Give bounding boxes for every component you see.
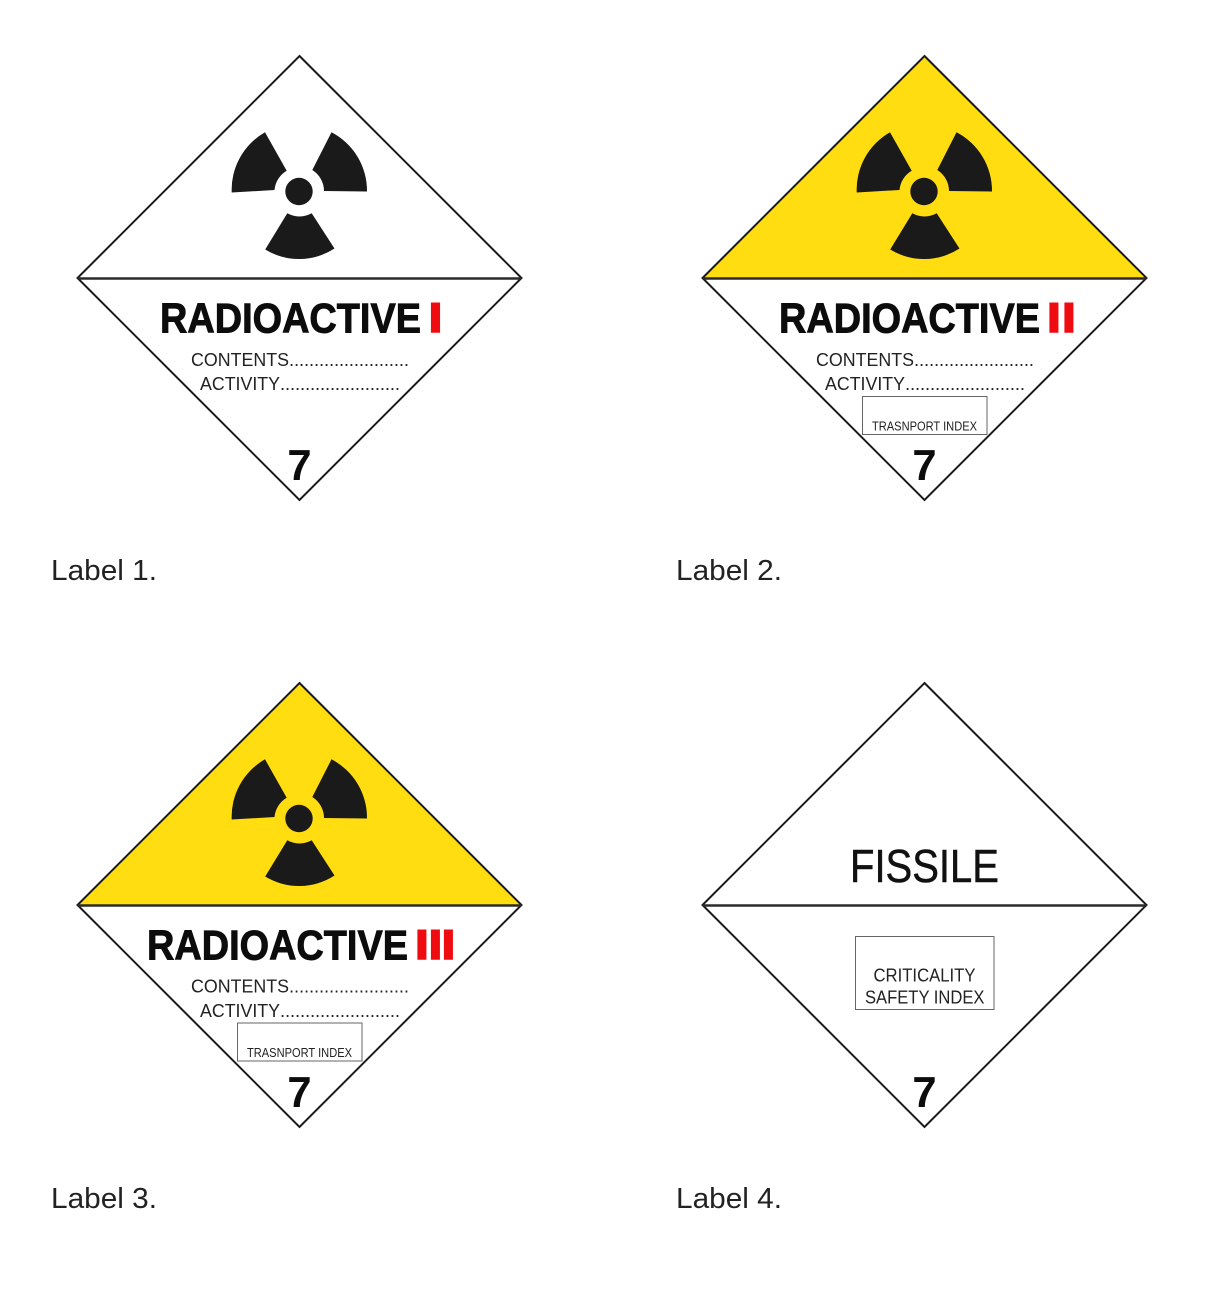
- text: contents line: CONTENTS: [191, 976, 289, 996]
- icon: radiation trefoil: [232, 759, 367, 886]
- transport index box: TRASNPORT INDEX: [247, 1046, 353, 1060]
- diamond outline: [702, 56, 1146, 500]
- diamond outline: [78, 683, 522, 1127]
- text: class number 7: 7: [287, 1069, 312, 1117]
- transport index box: [862, 396, 987, 434]
- heading: RADIOACTIVE I: RADIOACTIVE: [160, 294, 421, 342]
- text: activity line: ........................: [905, 373, 1025, 394]
- heading: RADIOACTIVE II: II: [1048, 297, 1074, 340]
- yellow upper triangle: [78, 683, 522, 905]
- diamond outline: [702, 683, 1146, 1127]
- text: activity line: ........................: [280, 1000, 400, 1021]
- icon: radiation trefoil: [857, 132, 992, 259]
- criticality safety index box: SAFETY INDEX: [865, 986, 984, 1008]
- heading: RADIOACTIVE III: III: [416, 924, 454, 967]
- panel: label 1 placard: [78, 56, 522, 500]
- caption: Label 4: Label 4.: [676, 1183, 782, 1215]
- caption: Label 1: Label 1.: [51, 555, 157, 587]
- transport index box: [238, 1023, 362, 1061]
- caption: Label 2: Label 2.: [676, 555, 782, 587]
- text: contents line: CONTENTS: [816, 349, 914, 370]
- text: activity line: [200, 1000, 400, 1021]
- text: contents line: CONTENTS: [191, 349, 289, 370]
- heading: RADIOACTIVE III: RADIOACTIVE: [147, 922, 408, 968]
- panel: label 2 placard: [702, 56, 1146, 500]
- text: activity line: [200, 373, 400, 394]
- text: activity line: ACTIVITY: [200, 373, 280, 394]
- yellow upper triangle: [702, 56, 1146, 278]
- text: activity line: ACTIVITY: [825, 373, 905, 394]
- text: contents line: ........................: [289, 349, 409, 370]
- caption: Label 3: Label 3.: [51, 1183, 157, 1215]
- transport index box: TRASNPORT INDEX: [872, 420, 978, 434]
- text: contents line: ........................: [914, 349, 1034, 370]
- text: contents line: ........................: [289, 976, 409, 996]
- icon: radiation trefoil: [232, 132, 367, 259]
- text: activity line: ACTIVITY: [200, 1000, 280, 1021]
- criticality safety index box: [856, 936, 994, 1010]
- panel: label 4 placard: [702, 683, 1146, 1127]
- text: activity line: ........................: [280, 373, 400, 394]
- diamond outline: [78, 56, 522, 500]
- diamond background: [78, 56, 522, 500]
- criticality safety index box: CRITICALITY: [874, 964, 976, 986]
- text: class number 7: 7: [912, 1069, 937, 1117]
- text: contents line: [191, 349, 409, 370]
- text: contents line: [191, 976, 409, 996]
- heading: FISSILE: FISSILE: [850, 840, 999, 892]
- heading: RADIOACTIVE I: I: [430, 297, 441, 340]
- text: activity line: [825, 373, 1025, 394]
- panel: label 3 placard: [78, 683, 522, 1127]
- text: class number 7: 7: [912, 442, 937, 490]
- text: class number 7: 7: [287, 442, 312, 490]
- text: contents line: [816, 349, 1034, 370]
- heading: RADIOACTIVE II: RADIOACTIVE: [779, 294, 1040, 342]
